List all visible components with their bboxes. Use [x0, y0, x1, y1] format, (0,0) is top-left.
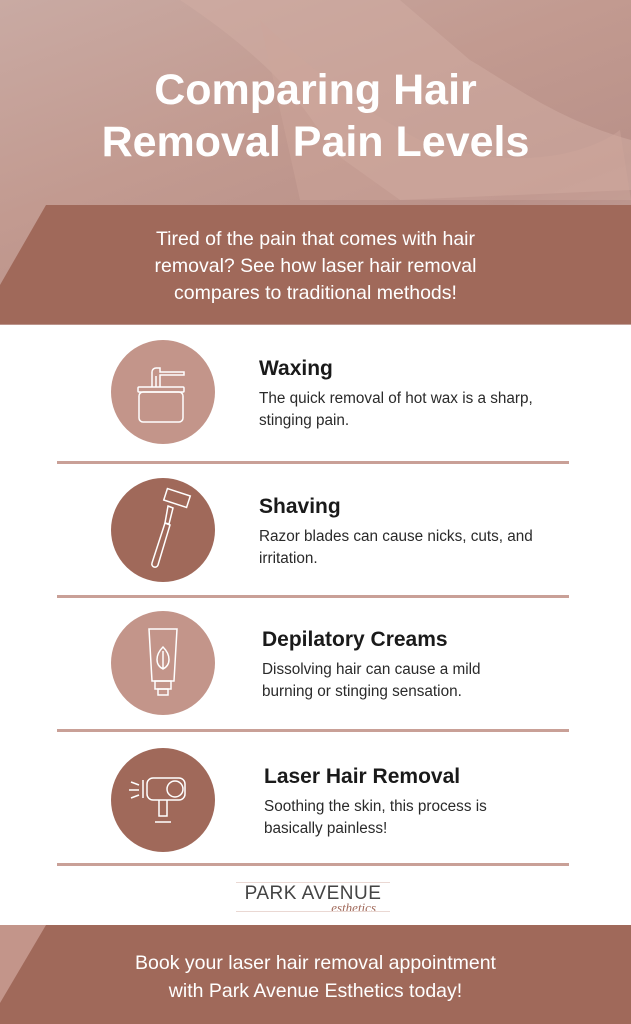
icon: cream tube [111, 611, 215, 715]
text: shaving [259, 528, 533, 567]
intro banner [0, 205, 631, 324]
logo: esthetics [331, 900, 376, 915]
logo: PARK AVENUE [245, 883, 381, 904]
row: waxing [111, 340, 533, 444]
icon: wax jar [111, 340, 215, 444]
row: shaving [111, 478, 533, 582]
heading: Waxing: Waxing [259, 357, 333, 380]
text: laser: Soothing the skin, this process is [264, 798, 487, 815]
text: shaving: irritation. [259, 550, 318, 567]
text: creams: Dissolving hair can cause a mild [262, 661, 481, 678]
call to action: with Park Avenue Esthetics today! [169, 980, 462, 1002]
text: laser [264, 798, 487, 837]
heading: Shaving: Shaving [259, 495, 341, 518]
hero photo background [0, 0, 631, 325]
intro text: removal? See how laser hair removal [155, 255, 476, 277]
call to action [135, 952, 496, 1002]
title: Removal Pain Levels [102, 118, 529, 166]
text: waxing: The quick removal of hot wax is a sharp, [259, 390, 533, 407]
text: waxing: stinging pain. [259, 412, 349, 429]
icon: laser device [111, 748, 215, 852]
text: shaving: Razor blades can cause nicks, cuts, and [259, 528, 533, 545]
text: laser: basically painless! [264, 820, 387, 837]
intro text: Tired of the pain that comes with hair [156, 228, 475, 250]
intro text: compares to traditional methods! [174, 282, 457, 304]
heading: Depilatory Creams: Depilatory Creams [262, 628, 448, 651]
call to action: Book your laser hair removal appointment [135, 952, 496, 974]
row: depilatory creams [111, 611, 481, 715]
intro text [155, 228, 476, 304]
text: creams [262, 661, 481, 700]
title [102, 66, 529, 166]
footer banner [0, 925, 631, 1024]
row: laser hair removal [111, 748, 487, 852]
heading: Laser Hair Removal: Laser Hair Removal [264, 765, 460, 788]
logo [236, 882, 390, 915]
text: creams: burning or stinging sensation. [262, 683, 462, 700]
title: Comparing Hair [154, 66, 477, 114]
text: waxing [259, 390, 533, 429]
icon: razor [111, 478, 215, 582]
